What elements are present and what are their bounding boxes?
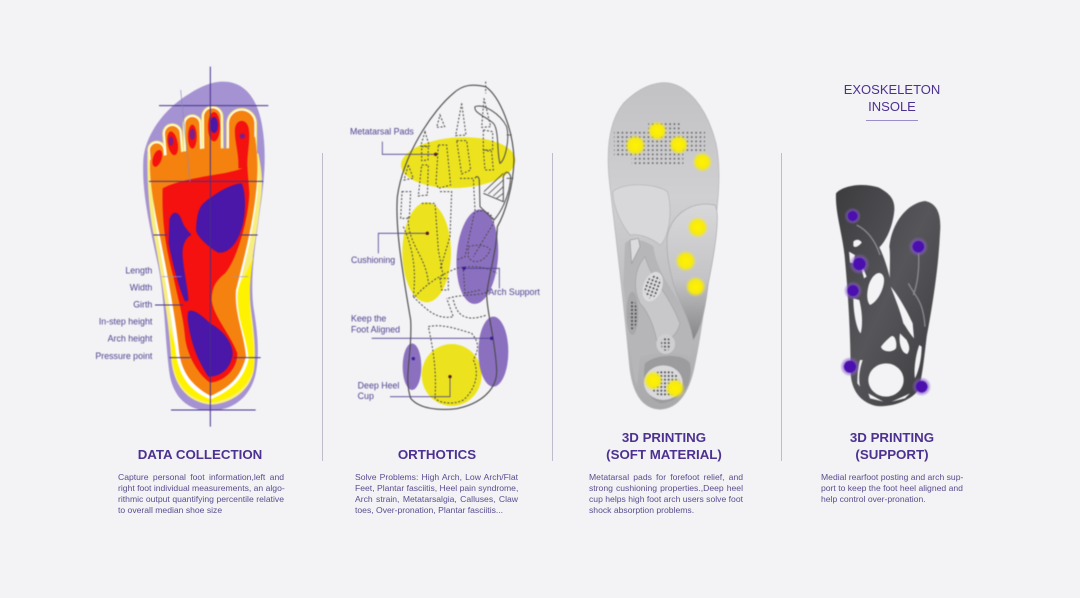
- zone labels: Cup: [358, 391, 374, 401]
- text: soft material description: strong cushioning properties.,Deep heel: [589, 483, 743, 493]
- divider: between orthotics and soft material: [552, 153, 553, 461]
- text: soft material description: shock absorption problems.: [589, 505, 694, 515]
- foot shape: pale yellow border: [147, 117, 262, 405]
- title: exoskeleton insole: [844, 82, 940, 114]
- panel: data collection: [95, 66, 285, 515]
- text: data collection description: to overall median shoe size: [118, 505, 222, 515]
- insole frame: [836, 185, 940, 406]
- zone labels: Cushioning: [351, 255, 395, 265]
- text: orthotics description: Solve Problems: High Arch, Low Arch/Flat: [355, 472, 518, 482]
- zone labels: Keep the: [351, 314, 386, 324]
- text: data collection description: Capture personal foot information,left and: [118, 472, 284, 482]
- yellow zones: [169, 257, 254, 403]
- illustration: dark exoskeleton insole: [835, 184, 942, 407]
- zone labels: Arch Support: [488, 287, 540, 297]
- heading: orthotics: ORTHOTICS: [398, 447, 476, 462]
- measurement labels: Pressure point: [95, 351, 153, 361]
- text: orthotics description: Feet, Plantar fasciitis, Heel pain syndrome,: [355, 483, 518, 493]
- zone labels: Foot Aligned: [351, 324, 400, 334]
- panel: 3D printing soft material: [589, 82, 743, 515]
- text: orthotics description: toes, Over-pronation, Plantar fasciitis...: [355, 505, 503, 515]
- panel: orthotics: [350, 81, 540, 515]
- heading: 3D printing support: [850, 430, 934, 462]
- title: exoskeleton insole: EXOSKELETON: [844, 82, 940, 97]
- text: data collection description: [118, 472, 285, 515]
- yellow pressure points: [625, 121, 712, 398]
- text: support description: help control over-pronation.: [821, 494, 926, 504]
- metatarsal perforations: [614, 121, 705, 165]
- text: soft material description: Metatarsal pads for forefoot relief, and: [589, 472, 743, 482]
- heading: 3D printing soft material: [606, 430, 722, 462]
- measurement labels: In-step height: [99, 317, 153, 327]
- insole body: [608, 83, 719, 409]
- heel cup: [644, 356, 691, 403]
- leader lines: [372, 142, 499, 397]
- measurement labels: [95, 265, 153, 361]
- text: support description: port to keep the foot heel aligned and: [821, 483, 963, 493]
- yellow cushioning zones: [400, 134, 517, 406]
- panel: 3D printing support: [821, 82, 963, 504]
- zone labels: Metatarsal Pads: [350, 127, 414, 137]
- red toe pads: [151, 112, 249, 168]
- measurement labels: Width: [130, 282, 152, 292]
- text: data collection description: right foot individual measurements, an algo-: [118, 483, 285, 493]
- frame cut-outs: [849, 240, 922, 402]
- diagram: foot skeleton with support zones: [350, 81, 540, 411]
- red zone: [162, 167, 249, 383]
- arch pad: [667, 204, 717, 340]
- measurement labels: Length: [125, 265, 152, 275]
- lobe highlights: [857, 225, 925, 327]
- title: exoskeleton insole: INSOLE: [868, 99, 916, 114]
- measurement labels: Girth: [133, 300, 152, 310]
- sesamoid and hallux solid strokes: [475, 106, 513, 220]
- heading: data collection: DATA COLLECTION: [138, 447, 262, 462]
- divider: between data collection and orthotics: [322, 153, 323, 461]
- purple markers: [840, 208, 931, 396]
- chart: foot pressure heat map with measurement labels: [95, 66, 269, 428]
- text: support description: Medial rearfoot posting and arch sup-: [821, 472, 963, 482]
- purple pressure toes: [169, 117, 245, 146]
- heading: 3D printing support: 3D PRINTING: [850, 430, 934, 445]
- zone labels: Deep Heel: [358, 380, 399, 390]
- forefoot pad: [613, 185, 670, 245]
- measurement labels: Arch height: [108, 334, 153, 344]
- purple pressure zones: [196, 183, 245, 253]
- heading: 3D printing soft material: 3D PRINTING: [622, 430, 706, 445]
- divider: between soft material and support: [781, 153, 782, 461]
- text: support description: [821, 472, 963, 504]
- white contour: [152, 117, 258, 399]
- heading: 3D printing soft material: (SOFT MATERIAL): [606, 447, 722, 462]
- underline: exoskeleton title: [866, 120, 918, 121]
- text: orthotics description: Arch strain, Metatarsalgia, Calluses, Claw: [355, 494, 518, 504]
- text: soft material description: cup helps high foot arch users solve foot: [589, 494, 743, 504]
- heading: 3D printing support: (SUPPORT): [855, 447, 929, 462]
- zone labels: [350, 127, 540, 401]
- text: orthotics description: [355, 472, 518, 515]
- purple support zones: [403, 208, 508, 390]
- measurement lines: [149, 67, 268, 427]
- orange zone: [150, 117, 257, 396]
- foot outline: [397, 85, 514, 409]
- lower sculpted relief: [623, 240, 691, 387]
- illustration: grey soft insole with yellow points: [607, 82, 720, 410]
- foot outline: purple halo: [143, 82, 265, 411]
- leader dots: [412, 153, 493, 378]
- side mesh panels: [639, 269, 667, 304]
- foot bones dashed: [401, 82, 497, 403]
- text: data collection description: rithmic output quantifying percentile relative: [118, 494, 284, 504]
- text: soft material description: [589, 472, 743, 515]
